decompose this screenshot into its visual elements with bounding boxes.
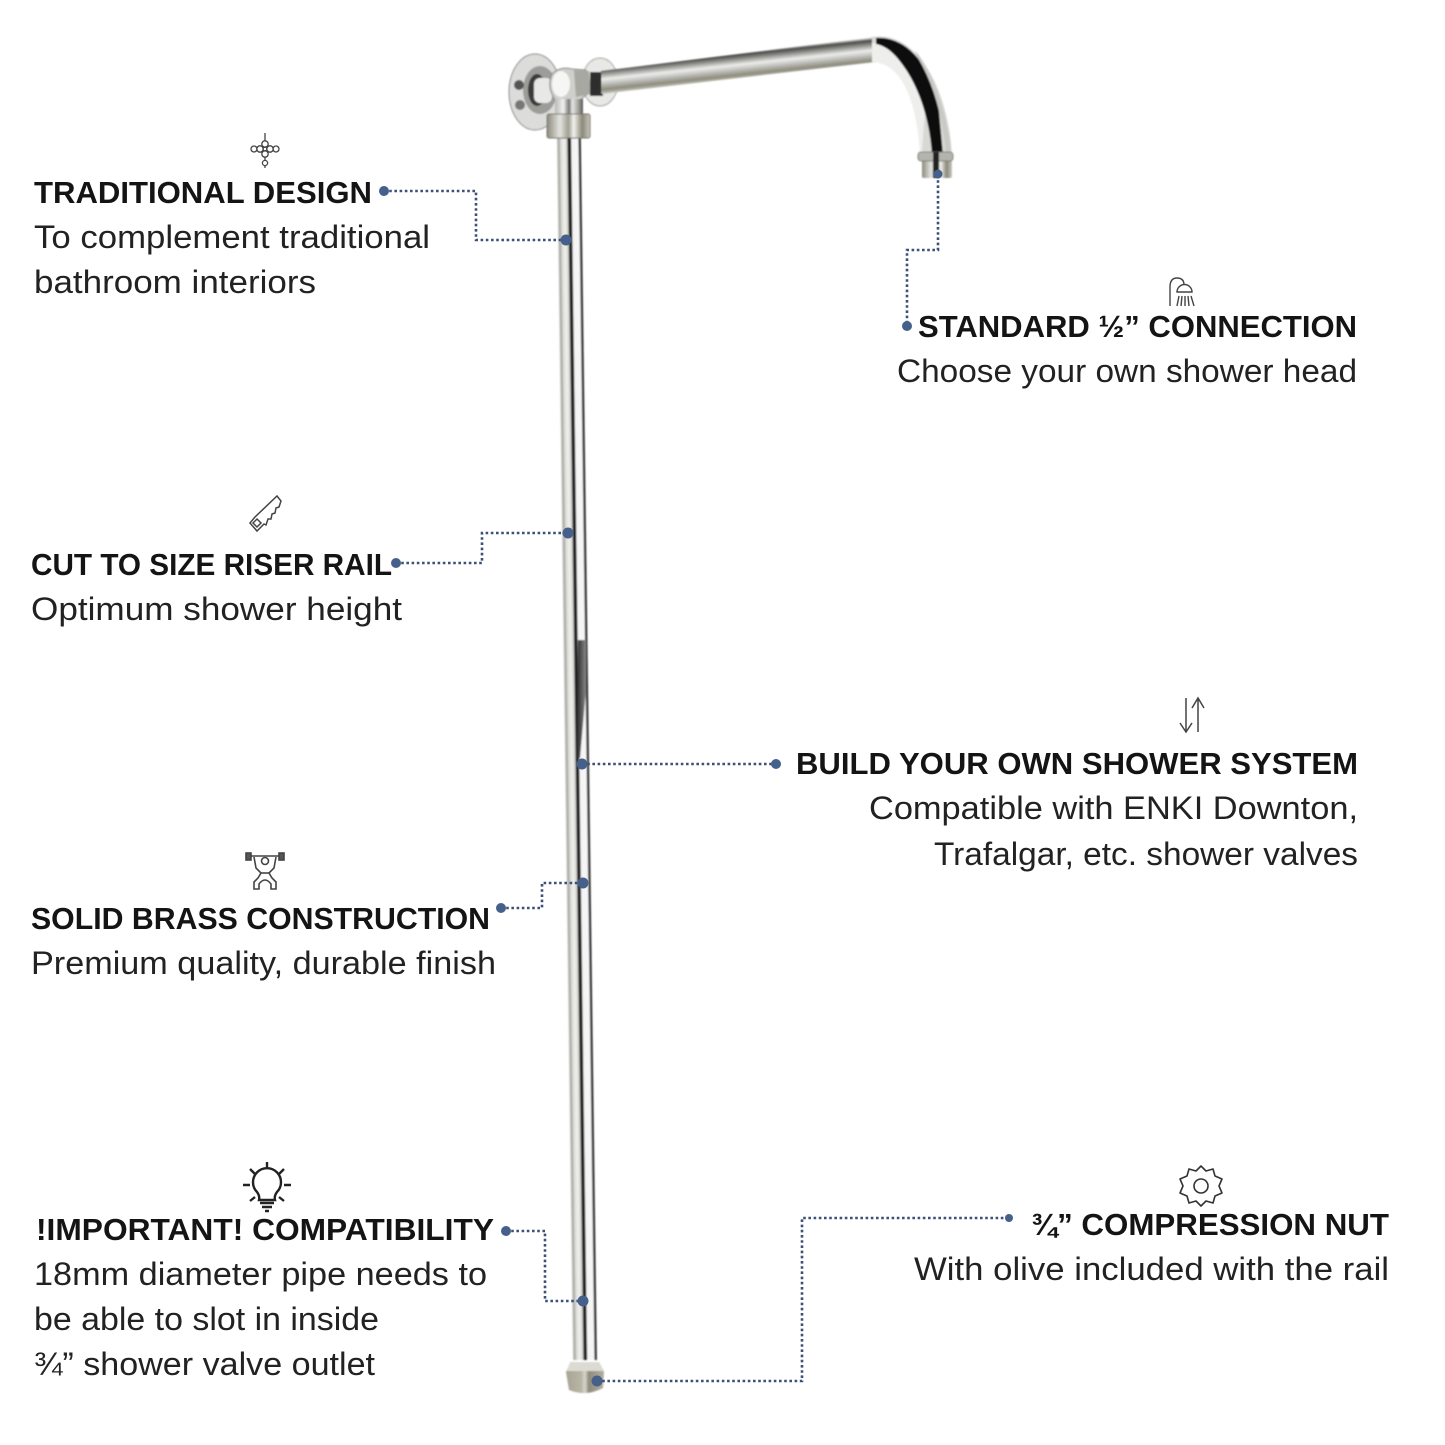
description: compatibility: 18mm diameter pipe needs to [34,1256,487,1292]
heading: compatibility: !IMPORTANT! COMPATIBILITY [36,1212,494,1247]
callout: solid brass [31,853,588,981]
description: solid brass: Premium quality, durable finish [31,945,496,981]
top compression nut [547,114,590,138]
icon: shower [1170,278,1194,306]
description: compatibility: be able to slot in inside [34,1301,379,1337]
bottom compression nut [566,1362,604,1393]
callout: standard connection [897,170,1357,389]
description: cut to size: Optimum shower height [31,591,402,627]
heading: compression nut: ¾” COMPRESSION NUT [1031,1207,1389,1242]
connector: compression nut [592,1214,1013,1386]
callout: compression nut [592,1166,1389,1386]
heading: build your own: BUILD YOUR OWN SHOWER SYSTEM [796,746,1358,781]
description: traditional design: bathroom interiors [34,264,316,300]
connector: standard connection [902,170,942,331]
description: standard connection: Choose your own shower head [897,353,1357,389]
description: traditional design [34,219,430,300]
icon: up and down arrows [1180,698,1204,732]
icon: gear [1180,1166,1222,1206]
heading: solid brass: SOLID BRASS CONSTRUCTION [31,901,490,936]
riser rail pipe [557,120,597,1360]
description: compression nut: With olive included with the rail [914,1251,1389,1287]
heading: standard connection: STANDARD ½” CONNECTION [918,309,1357,344]
arm outlet thread [918,152,953,178]
connector: compatibility [501,1226,588,1306]
connector: build your own [576,758,781,770]
description: compatibility [34,1256,487,1382]
heading: traditional design: TRADITIONAL DESIGN [34,175,372,210]
heading: cut to size: CUT TO SIZE RISER RAIL [31,547,392,582]
icon: saw [250,496,281,531]
callout: compatibility [34,1162,588,1382]
connector: solid brass [496,878,588,913]
description: traditional design: To complement traditional [34,219,430,255]
description: build your own: Compatible with ENKI Downton, [869,790,1358,826]
icon: light bulb [243,1162,291,1211]
description: build your own: Trafalgar, etc. shower valves [934,836,1358,872]
description: compatibility: ¾” shower valve outlet [34,1346,375,1382]
connector: cut to size [391,528,574,568]
description: build your own [869,790,1358,872]
wall bracket and elbow [509,54,618,138]
connector: traditional design [379,186,572,246]
callout: cut to size [31,496,574,627]
icon: knot [251,133,279,168]
shower arm [601,36,953,178]
icon: weightlifter [246,853,284,889]
callout: build your own [576,698,1358,872]
callout: traditional design [34,133,572,300]
